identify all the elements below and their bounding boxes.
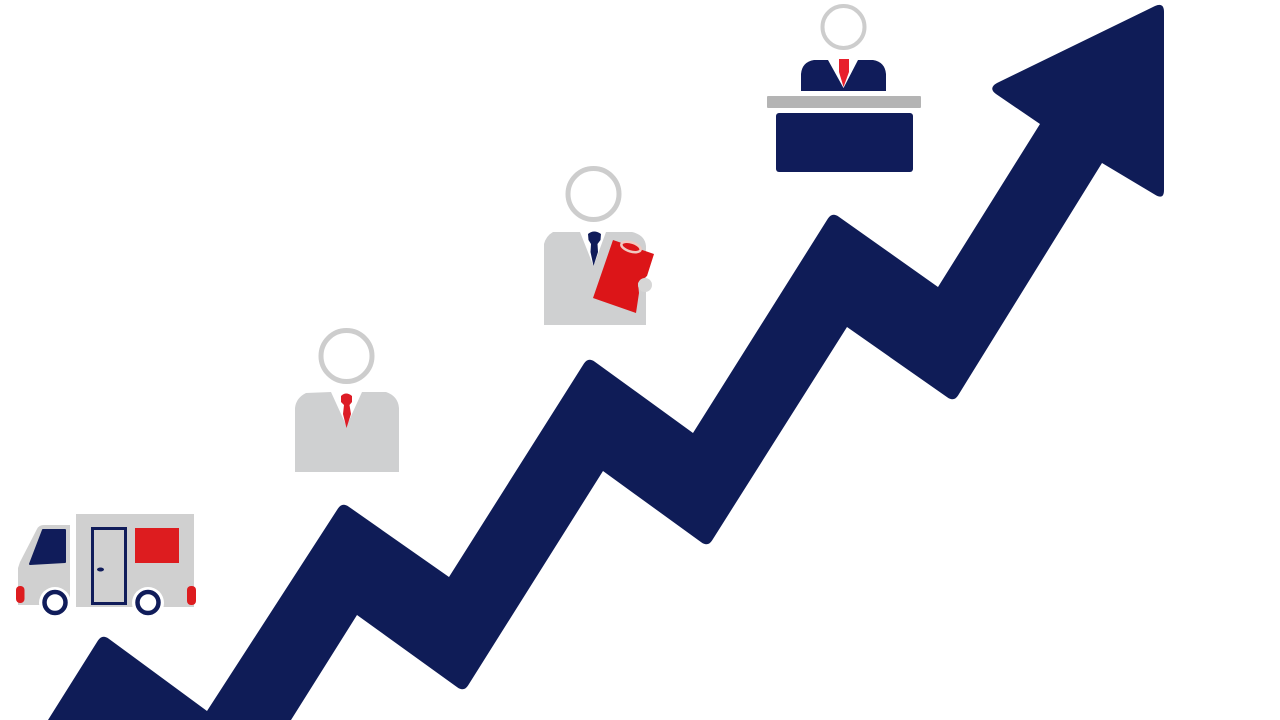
icon: supervisor with clipboard (544, 168, 654, 325)
truck front light (187, 586, 196, 605)
head (568, 168, 619, 220)
icon: speaker at podium (767, 6, 921, 172)
navy tie (588, 232, 601, 266)
suit (295, 392, 399, 472)
red clipboard (593, 240, 654, 313)
truck wheel left tyre (44, 592, 66, 613)
icon: delivery truck (16, 514, 196, 619)
truck red panel (135, 528, 179, 563)
truck wheel right (132, 587, 164, 619)
clipboard clip (620, 240, 642, 254)
truck rear light (16, 586, 24, 603)
podium top (767, 96, 921, 108)
red tie (839, 59, 849, 87)
truck wheel right tyre (138, 592, 158, 613)
truck cab window (30, 530, 65, 564)
podium base (776, 113, 913, 172)
suit (544, 232, 646, 325)
truck cargo box (76, 514, 194, 607)
red tie (341, 394, 352, 428)
truck wheel left (39, 587, 71, 619)
navy suit (801, 60, 886, 91)
head (822, 6, 864, 48)
icon: employee with red tie (295, 330, 399, 472)
truck door handle (97, 568, 104, 572)
hand (638, 278, 652, 292)
truck cab (18, 525, 70, 605)
truck door (92, 528, 126, 604)
head (321, 330, 372, 382)
